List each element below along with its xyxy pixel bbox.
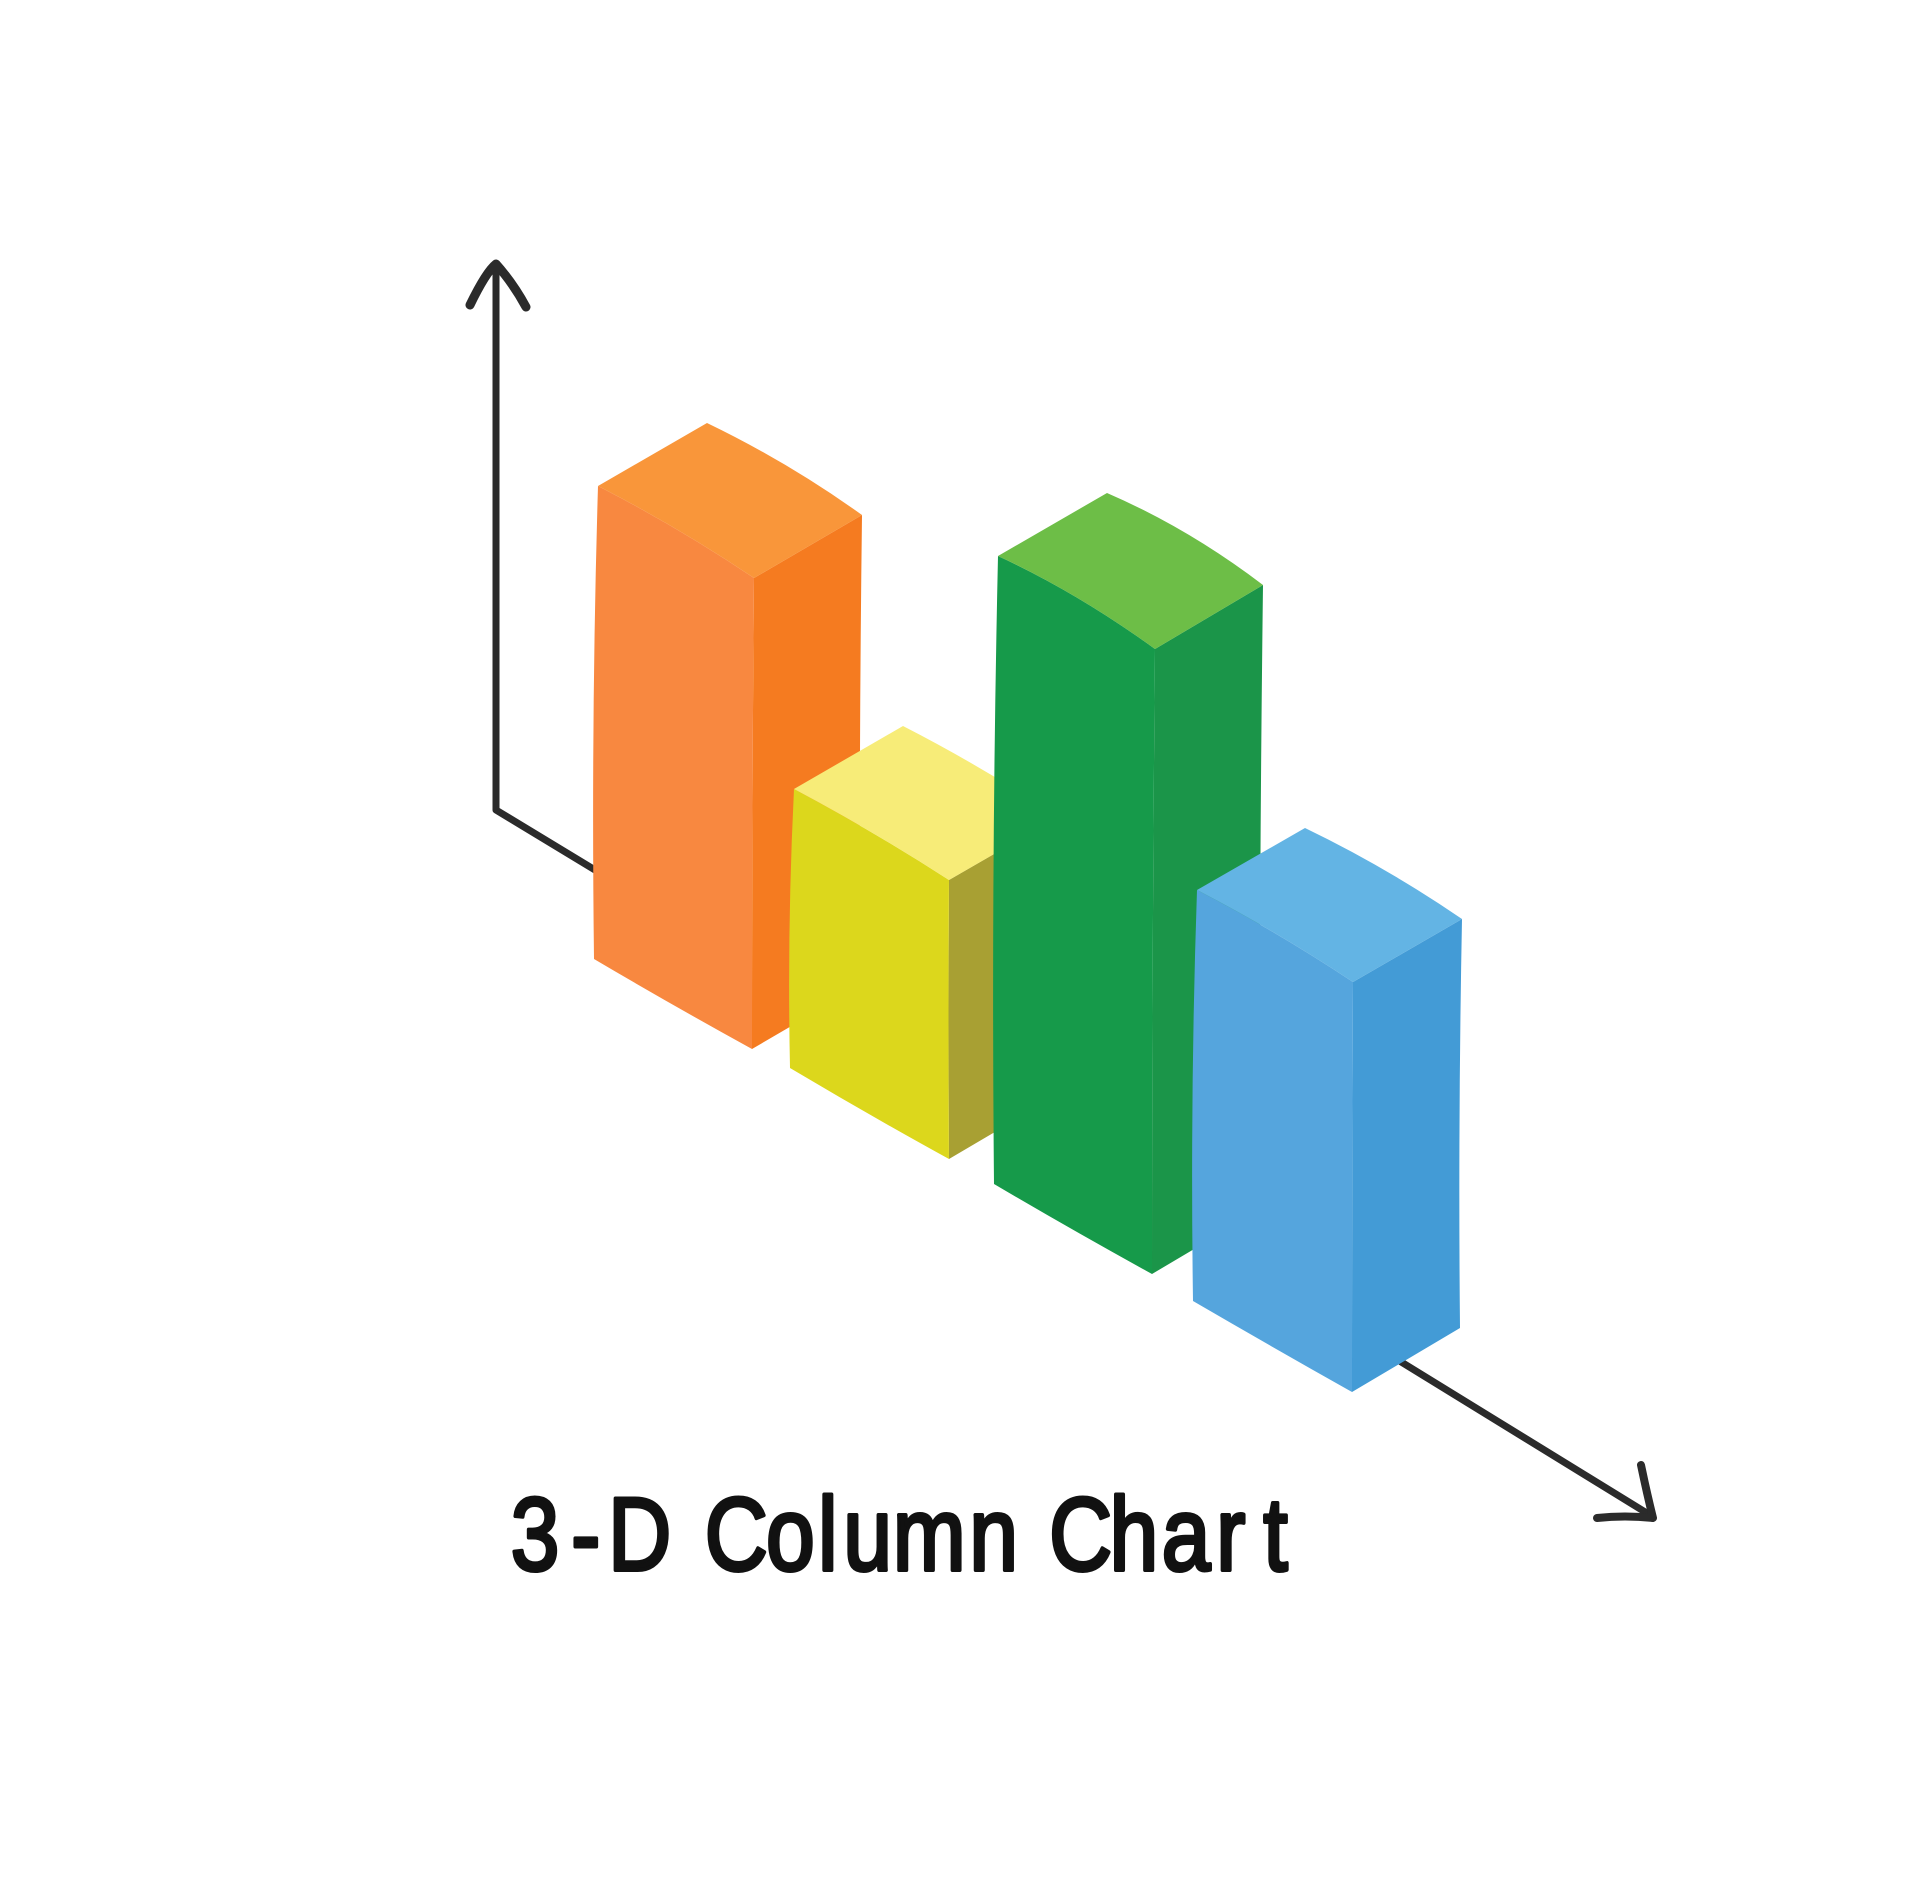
yellow left face [789, 789, 949, 1159]
column: orange [593, 423, 862, 1049]
green left face [993, 556, 1155, 1274]
green right face [1152, 585, 1263, 1274]
column: green [993, 493, 1263, 1274]
yellow right face [948, 817, 1058, 1159]
blue left face [1192, 890, 1353, 1392]
green top face [998, 493, 1263, 649]
orange left face [593, 486, 754, 1049]
blue top face [1197, 828, 1462, 982]
orange right face [752, 515, 862, 1049]
title: 3-D Column Chart [511, 1477, 1288, 1593]
column: yellow [789, 726, 1058, 1159]
y axis with arrow [470, 264, 600, 873]
x axis with arrow [1398, 1360, 1653, 1518]
yellow top face [794, 726, 1058, 880]
blue right face [1352, 919, 1462, 1392]
orange top face [598, 423, 862, 578]
column: blue [1192, 828, 1462, 1392]
